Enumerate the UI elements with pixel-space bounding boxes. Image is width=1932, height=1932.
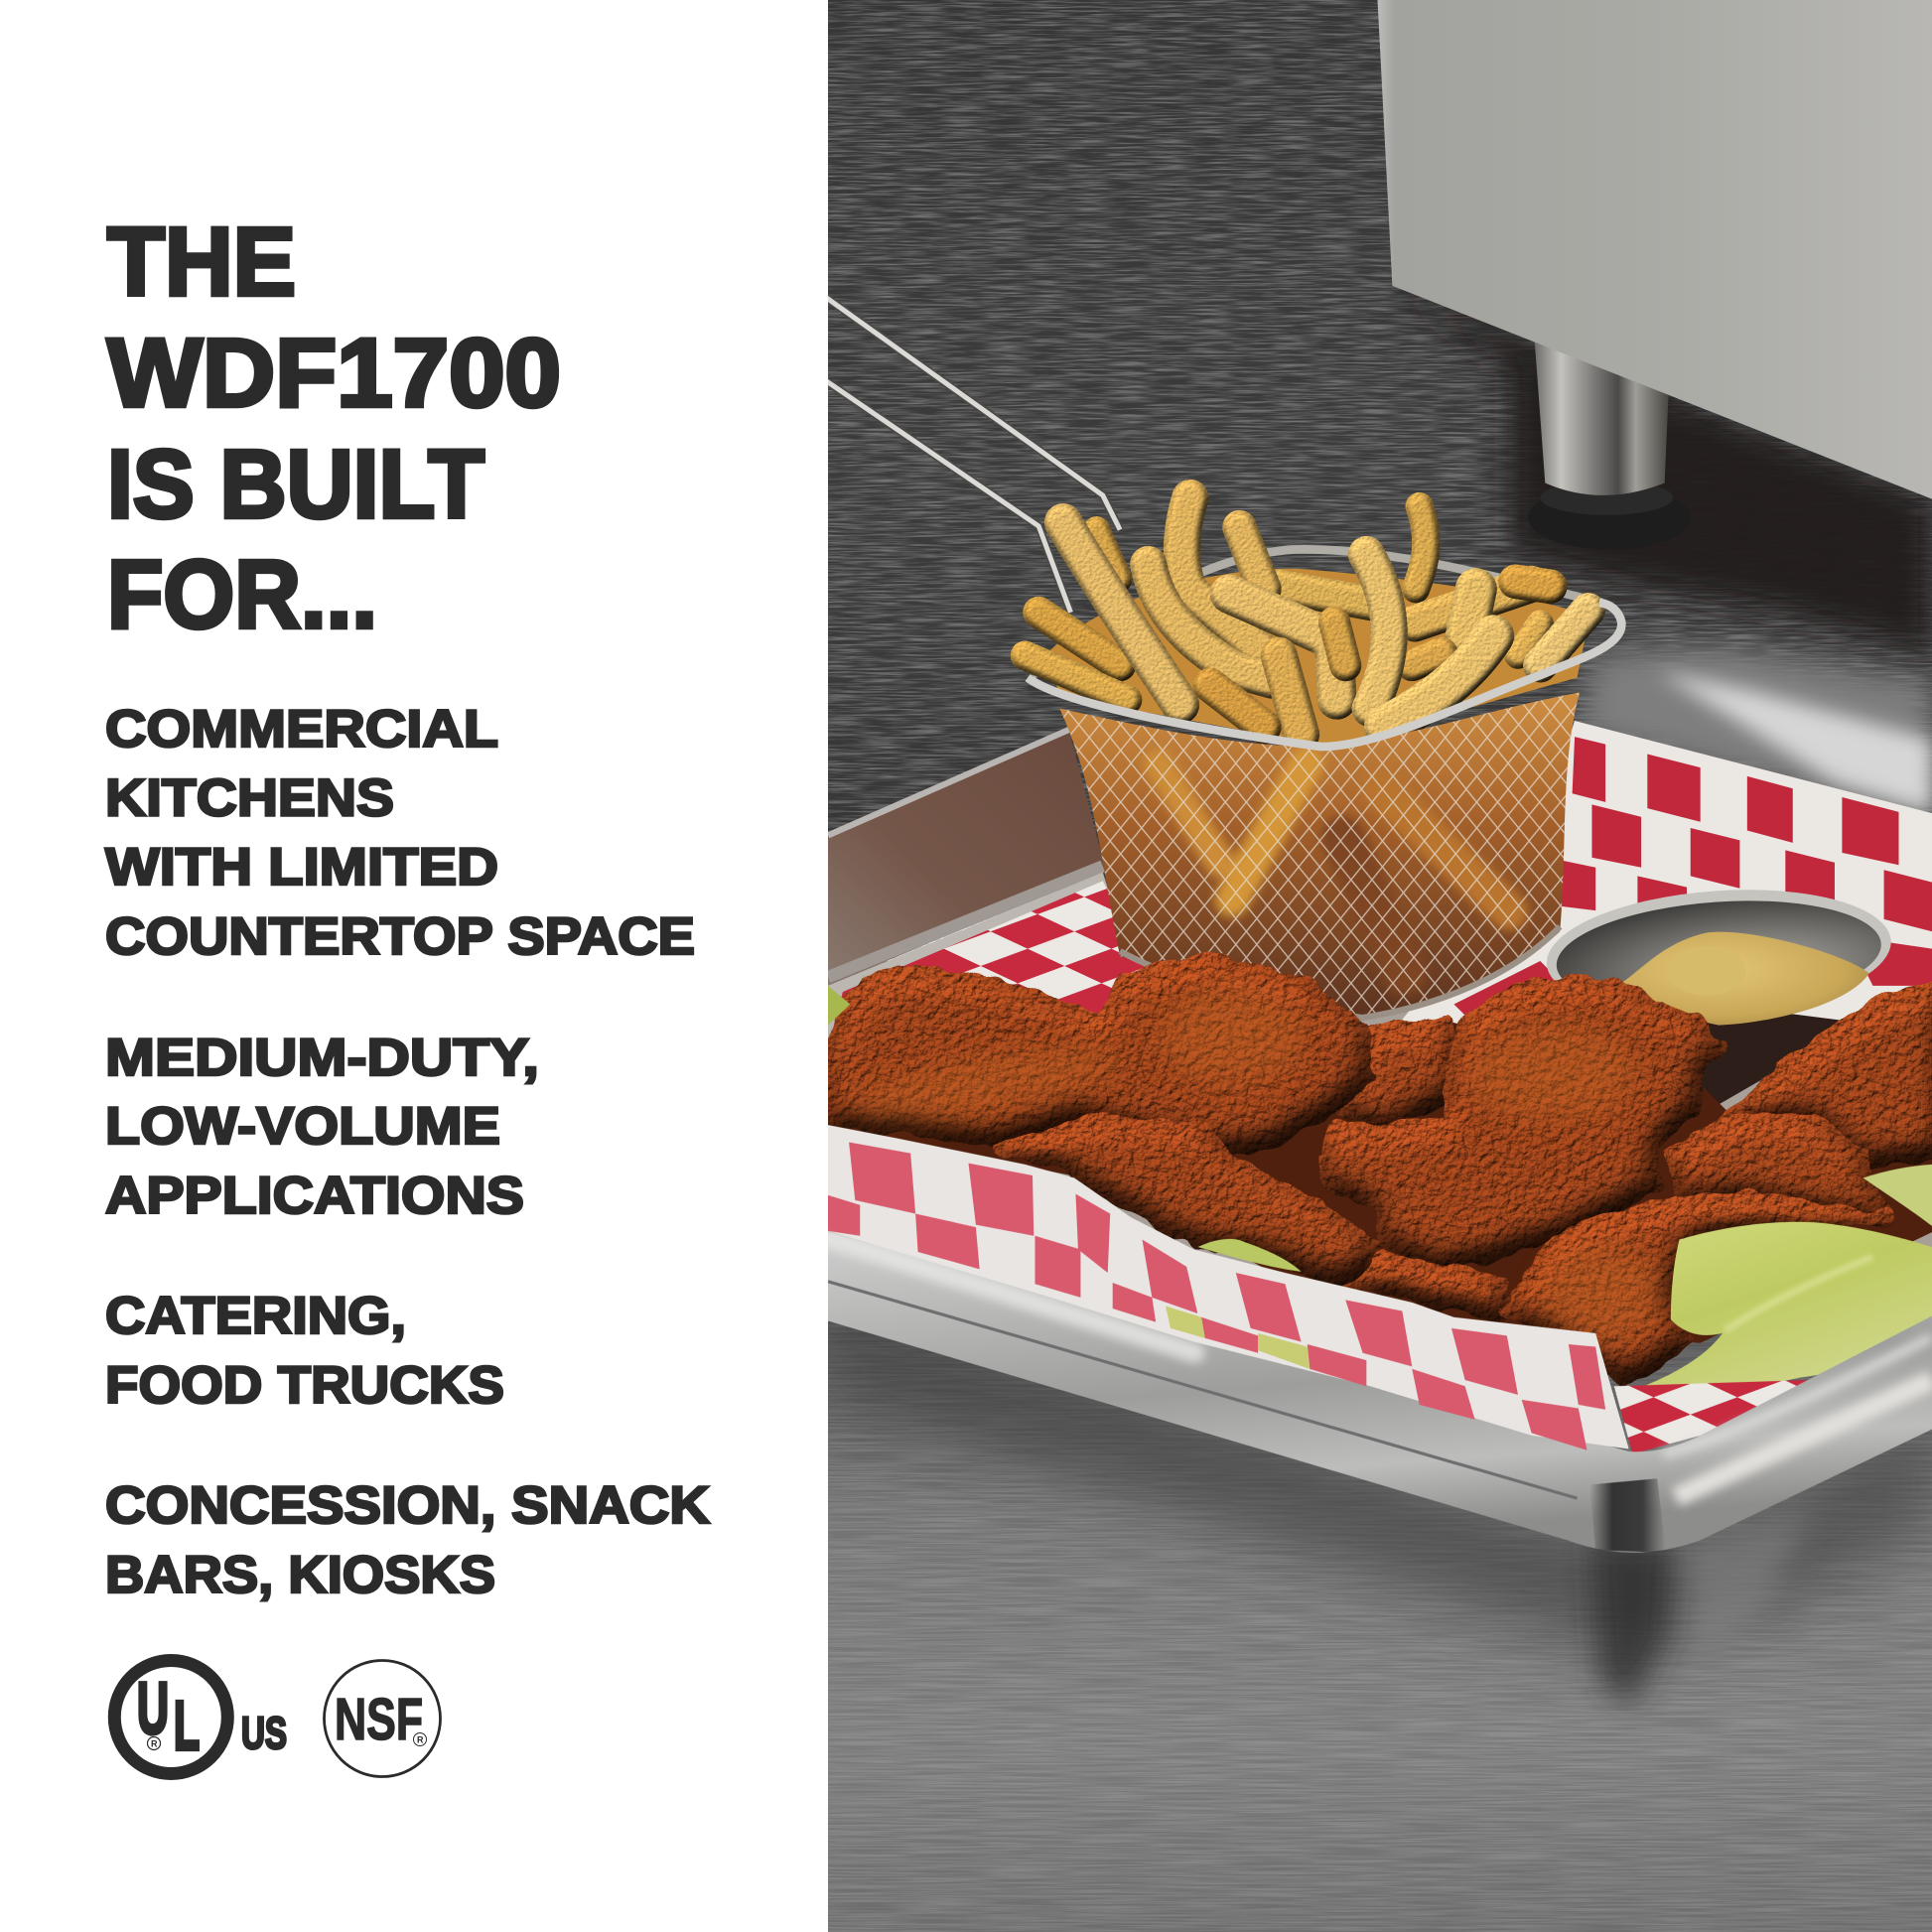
text block: medium-duty: APPLICATIONS <box>105 1167 524 1225</box>
chicken: center back piece <box>1334 1021 1461 1130</box>
icon: UL US certification mark: R <box>151 1739 158 1749</box>
text block: commercial kitchens <box>105 700 695 966</box>
tray shadow on countertop <box>828 1307 1932 1707</box>
text block: commercial kitchens: COUNTERTOP SPACE <box>105 907 695 966</box>
left text panel background <box>0 0 828 1932</box>
text block: commercial kitchens: WITH LIMITED <box>105 838 498 897</box>
mustard <box>1618 932 1869 1026</box>
text block: concession <box>105 1476 710 1604</box>
text block: catering: FOOD TRUCKS <box>105 1356 504 1415</box>
icon: UL US certification mark: US <box>241 1708 287 1758</box>
icon: UL US certification mark: U <box>137 1669 169 1749</box>
wire basket body <box>1059 692 1580 1018</box>
tray front rim <box>828 1232 1932 1553</box>
fries <box>1026 497 1589 747</box>
chicken: right middle piece <box>1670 1119 1884 1222</box>
chicken: left piece <box>828 956 1370 1152</box>
tray interior base <box>828 961 1932 1267</box>
machine foot <box>1528 333 1691 550</box>
lettuce <box>828 986 1932 1390</box>
title <box>107 207 561 648</box>
chicken: glossy highlights <box>848 986 1663 1343</box>
icon: NSF certification mark: R <box>417 1735 424 1745</box>
chicken pieces <box>828 956 1932 1382</box>
title: IS BUILT <box>107 430 484 538</box>
chicken: center large piece <box>1320 978 1723 1267</box>
text block: concession: CONCESSION, SNACK <box>105 1476 710 1535</box>
panel: food photo <box>813 0 1932 1932</box>
text block: commercial kitchens: KITCHENS <box>105 768 394 828</box>
icon: UL US certification mark: L <box>174 1687 200 1764</box>
chicken: small bottom piece <box>1342 1258 1503 1315</box>
shadow under machine <box>1392 286 1932 653</box>
basket back rim <box>1033 549 1601 675</box>
corner paper liner <box>1614 1380 1811 1453</box>
icon: NSF certification mark <box>324 1660 441 1777</box>
title: THE <box>107 207 296 316</box>
text block: medium-duty <box>105 1029 539 1225</box>
front paper liner <box>828 1125 1629 1450</box>
title: WDF1700 <box>107 319 561 427</box>
chicken: front center piece <box>997 1116 1376 1280</box>
handle wires <box>813 288 1120 613</box>
icon: UL US certification mark <box>114 1660 287 1773</box>
mustard cup <box>1547 890 1891 1104</box>
text block: commercial kitchens: COMMERCIAL <box>105 700 498 759</box>
text block: catering: CATERING, <box>105 1287 406 1345</box>
chicken: bottom right piece <box>1503 1195 1884 1382</box>
chicken: right back piece <box>1728 980 1932 1165</box>
tray back rim <box>828 727 1108 1037</box>
text block: concession: BARS, KIOSKS <box>105 1546 495 1604</box>
countertop upper <box>828 0 1932 986</box>
paper liner behind basket: left <box>833 882 1144 1029</box>
icon: NSF certification mark: NSF <box>335 1687 423 1752</box>
text block: medium-duty: MEDIUM-DUTY, <box>105 1029 539 1087</box>
countertop lower <box>828 1294 1932 1932</box>
stainless highlight on countertop <box>1578 647 1932 826</box>
title: FOR... <box>107 540 377 648</box>
basket front rim <box>1028 603 1621 747</box>
text block: medium-duty: LOW-VOLUME <box>105 1097 500 1156</box>
paper liner behind basket: right <box>1402 721 1932 1024</box>
text block: catering <box>105 1287 504 1415</box>
machine body <box>1378 0 1932 499</box>
